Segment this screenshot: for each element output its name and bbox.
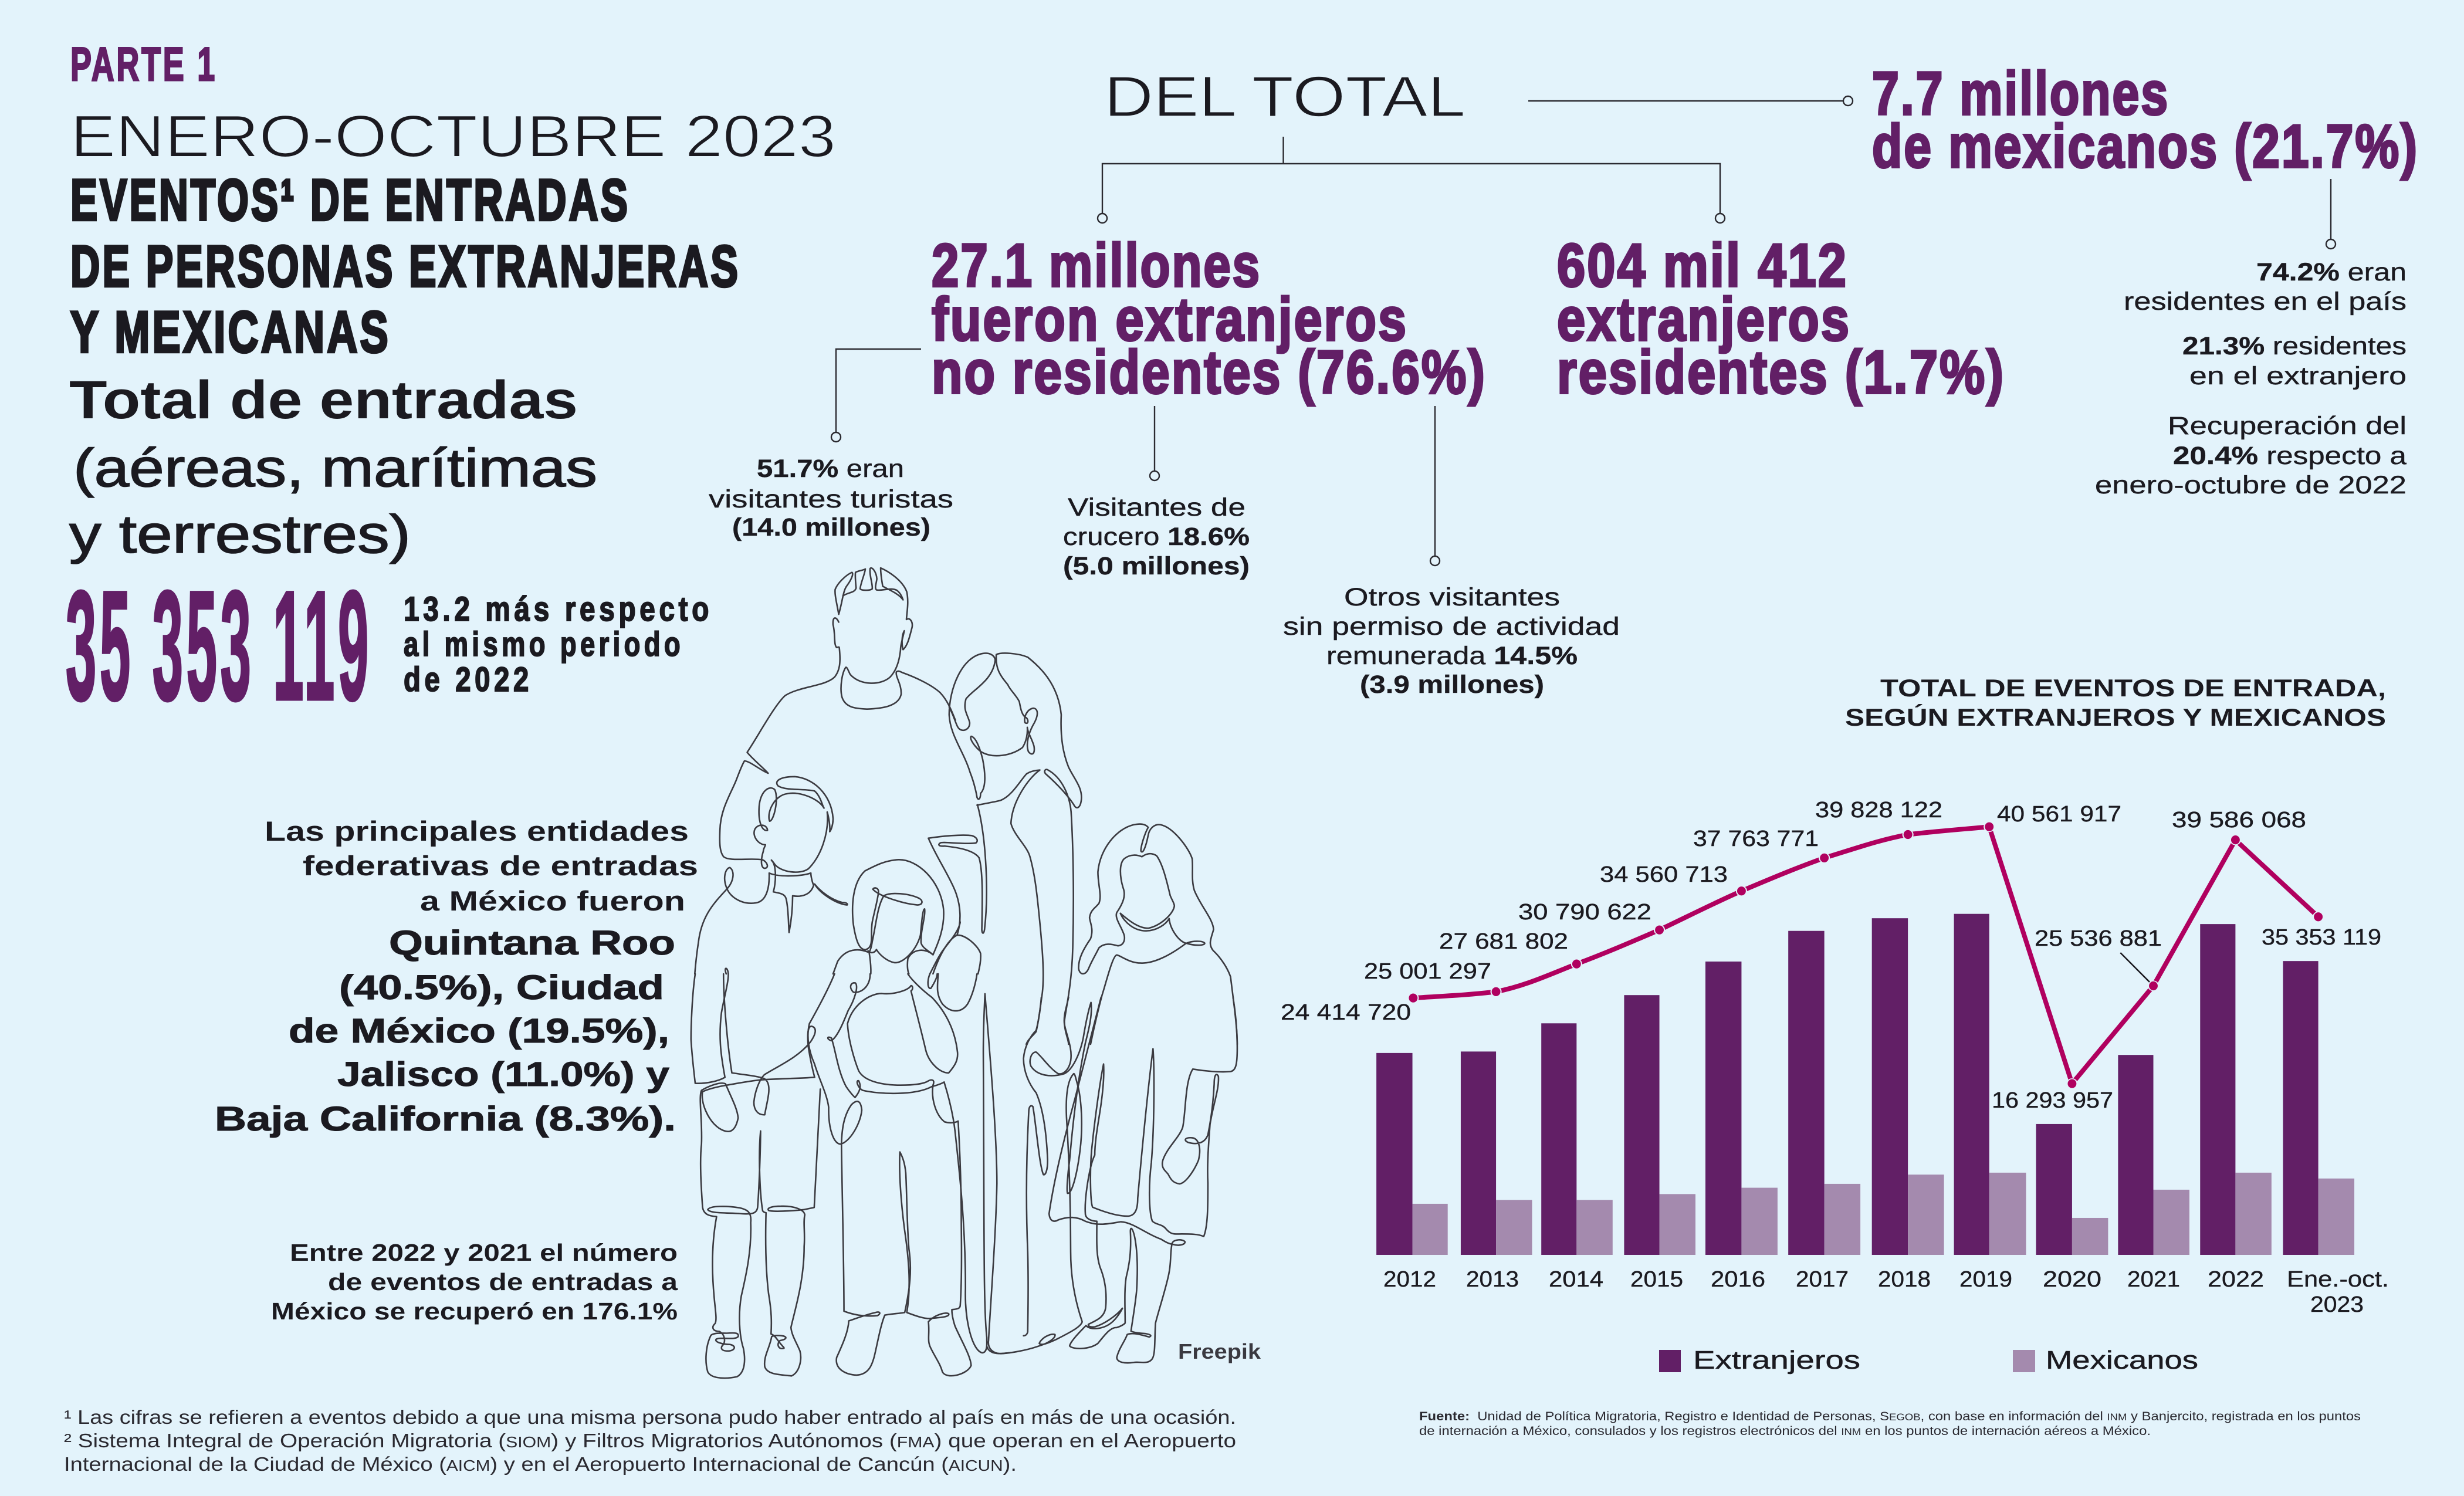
data labels: 37 763 771 — [1693, 827, 1819, 851]
foreign residents figure: extranjeros — [1557, 286, 1851, 354]
federal entities text: Quintana Roo — [389, 924, 675, 962]
chart: events of entry — [1281, 798, 2389, 1317]
legend: extranjeros: Extranjeros — [1693, 1346, 1860, 1375]
mexicans detail notes: 20.4% respecto a — [2173, 442, 2407, 470]
federal entities text: Jalisco (11.0%) y — [337, 1055, 669, 1094]
comparison note — [404, 590, 713, 699]
tourists note: (14.0 millones) — [732, 513, 930, 541]
data labels: 25 536 881 — [2035, 926, 2162, 951]
mother and young girl lower — [987, 997, 1237, 1363]
foreign non-residents figure — [932, 232, 1487, 407]
x axis labels: 2013 — [1466, 1267, 1519, 1292]
legend: mexicanos: Mexicanos — [2046, 1346, 2198, 1375]
mother and young girl upper — [949, 653, 1237, 1044]
connector: cruise — [1150, 406, 1159, 480]
illustration: family line drawing — [691, 568, 1237, 1378]
foreign residents figure: 604 mil 412 — [1557, 232, 1848, 300]
source note: de internación a México, consulados y los registros electrónicos del INM en los puntos de internación aéreos a México. — [1419, 1424, 2151, 1438]
federal entities text: (40.5%), Ciudad — [339, 969, 664, 1007]
main heading: Y MEXICANAS — [70, 299, 391, 364]
data labels: 39 586 068 — [2172, 808, 2306, 832]
federal entities text: de México (19.5%), — [289, 1012, 669, 1050]
connector: del total to mexicanos — [1528, 96, 1853, 106]
footnotes: Internacional de la Ciudad de México ( AICM ) y en el Aeropuerto Internacional de Cancún ( AICUN ). — [64, 1453, 1017, 1475]
federal entities text: Las principales entidades — [265, 815, 689, 847]
x axis labels: 2017 — [1796, 1267, 1849, 1292]
comparison note: al mismo periodo — [404, 625, 684, 664]
main heading: EVENTOS¹ DE ENTRADAS — [70, 167, 630, 232]
data labels: 25 001 297 — [1364, 959, 1491, 984]
data labels: 30 790 622 — [1518, 900, 1651, 925]
mexicans detail notes — [2095, 258, 2407, 499]
del total heading: DEL TOTAL — [1104, 65, 1465, 128]
comparison note: de 2022 — [404, 661, 533, 699]
chart title: SEGÚN EXTRANJEROS Y MEXICANOS — [1845, 703, 2386, 731]
chart title — [1845, 674, 2386, 731]
connector tree: del total to extranjeros — [1098, 137, 1725, 223]
footnotes: ² Sistema Integral de Operación Migratoria ( SIOM ) y Filtros Migratorios Autónomos ( FMA ) que operan en el Aeropuerto — [64, 1430, 1236, 1451]
cruise note — [1063, 493, 1250, 580]
subheading total de entradas: y terrestres) — [69, 505, 411, 564]
legend — [1659, 1346, 2198, 1375]
legend: mexicanos — [2013, 1346, 2198, 1375]
foreign residents figure: residentes (1.7%) — [1557, 339, 2005, 407]
federal entities text: a México fueron — [420, 885, 685, 916]
connector: mexicans detail — [2326, 179, 2336, 249]
comparison note: 13.2 más respecto — [404, 590, 713, 628]
data labels — [1281, 798, 2381, 1113]
bars: extranjeros — [1376, 914, 2319, 1255]
other visitors note — [1283, 583, 1620, 699]
mexicans detail notes: 74.2% eran — [2256, 258, 2407, 286]
bars: mexicanos — [1413, 1173, 2354, 1255]
tourists note — [709, 455, 953, 541]
cruise note: (5.0 millones) — [1063, 552, 1250, 580]
connector: other visitors — [1430, 406, 1440, 566]
part label: PARTE 1 — [70, 38, 217, 91]
recovery text — [271, 1239, 678, 1325]
federal entities text: federativas de entradas — [303, 850, 698, 881]
data labels: 34 560 713 — [1600, 862, 1728, 887]
title block — [66, 38, 836, 733]
mexicans detail notes: Recuperación del — [2168, 412, 2407, 440]
data labels: 39 828 122 — [1815, 798, 1942, 823]
foreign non-residents figure: 27.1 millones — [932, 232, 1261, 300]
foreign non-residents figure: no residentes (76.6%) — [932, 339, 1487, 407]
main heading: DE PERSONAS EXTRANJERAS — [70, 233, 740, 299]
x axis labels: 2022 — [2208, 1267, 2264, 1292]
data labels: 24 414 720 — [1281, 1000, 1411, 1025]
mexicans detail notes: 21.3% residentes — [2182, 332, 2407, 360]
x axis labels: 2021 — [2127, 1267, 2180, 1292]
source note: Fuente: Unidad de Política Migratoria, Registro e Identidad de Personas, S EGOB , con base en información del INM y Banjercito, registrada en los puntos — [1419, 1410, 2361, 1423]
recovery text: México se recuperó en 176.1% — [271, 1298, 678, 1325]
mexicanos figure — [1872, 60, 2419, 181]
mexicans detail notes: en el extranjero — [2189, 362, 2407, 390]
main heading — [70, 167, 740, 364]
subheading total de entradas: (aéreas, marítimas — [73, 438, 597, 498]
x axis labels: 2020 — [2043, 1267, 2101, 1292]
legend: extranjeros — [1659, 1346, 1860, 1375]
x axis labels: 2019 — [1959, 1267, 2012, 1292]
line series: total — [1408, 822, 2323, 1088]
subheading total de entradas: Total de entradas — [69, 370, 578, 430]
chart title: TOTAL DE EVENTOS DE ENTRADA, — [1880, 674, 2386, 702]
other visitors note: Otros visitantes — [1344, 583, 1560, 611]
footnotes — [64, 1406, 1236, 1475]
x axis labels — [1383, 1267, 2389, 1317]
other visitors note: sin permiso de actividad — [1283, 612, 1620, 641]
boy and girl lower — [691, 974, 1009, 1378]
x axis labels: 2023 — [2310, 1292, 2364, 1317]
data labels: 27 681 802 — [1439, 929, 1568, 954]
other visitors note: (3.9 millones) — [1360, 671, 1544, 699]
x axis labels: 2018 — [1878, 1267, 1931, 1292]
recovery text: Entre 2022 y 2021 el número — [290, 1239, 678, 1266]
subheading total de entradas — [69, 370, 597, 564]
data labels: 35 353 119 — [2262, 925, 2381, 950]
mexicanos figure: 7.7 millones — [1872, 60, 2169, 128]
other visitors note: remunerada 14.5% — [1326, 642, 1578, 670]
source note — [1419, 1410, 2361, 1438]
cruise note: crucero 18.6% — [1063, 523, 1250, 551]
x axis labels: 2012 — [1383, 1267, 1436, 1292]
cruise note: Visitantes de — [1068, 493, 1245, 522]
image credit: Freepik — [1178, 1339, 1261, 1363]
footnotes: ¹ Las cifras se refieren a eventos debido a que una misma persona pudo haber entrado al país en más de una ocasión. — [64, 1406, 1236, 1428]
data labels: 40 561 917 — [1997, 802, 2121, 827]
recovery text: de eventos de entradas a — [328, 1268, 678, 1295]
foreign residents figure — [1557, 232, 2005, 407]
connector: tourists — [831, 349, 921, 442]
x axis labels: Ene.-oct. — [2287, 1267, 2389, 1292]
mexicans detail notes: residentes en el país — [2124, 287, 2407, 316]
mexicans detail notes: enero-octubre de 2022 — [2095, 471, 2407, 499]
period heading: ENERO-OCTUBRE 2023 — [70, 104, 836, 170]
tourists note: 51.7% eran — [757, 455, 904, 483]
title block: 35 353 119 — [66, 559, 372, 733]
x axis labels: 2014 — [1549, 1267, 1603, 1292]
tourists note: visitantes turistas — [709, 485, 953, 513]
x axis labels: 2016 — [1711, 1267, 1765, 1292]
federal entities text: Baja California (8.3%). — [215, 1100, 676, 1138]
foreign non-residents figure: fueron extranjeros — [932, 286, 1408, 354]
data labels: 16 293 957 — [1992, 1088, 2113, 1113]
father and boy upper — [695, 568, 987, 974]
x axis labels: 2015 — [1630, 1267, 1683, 1292]
federal entities text — [215, 815, 698, 1138]
